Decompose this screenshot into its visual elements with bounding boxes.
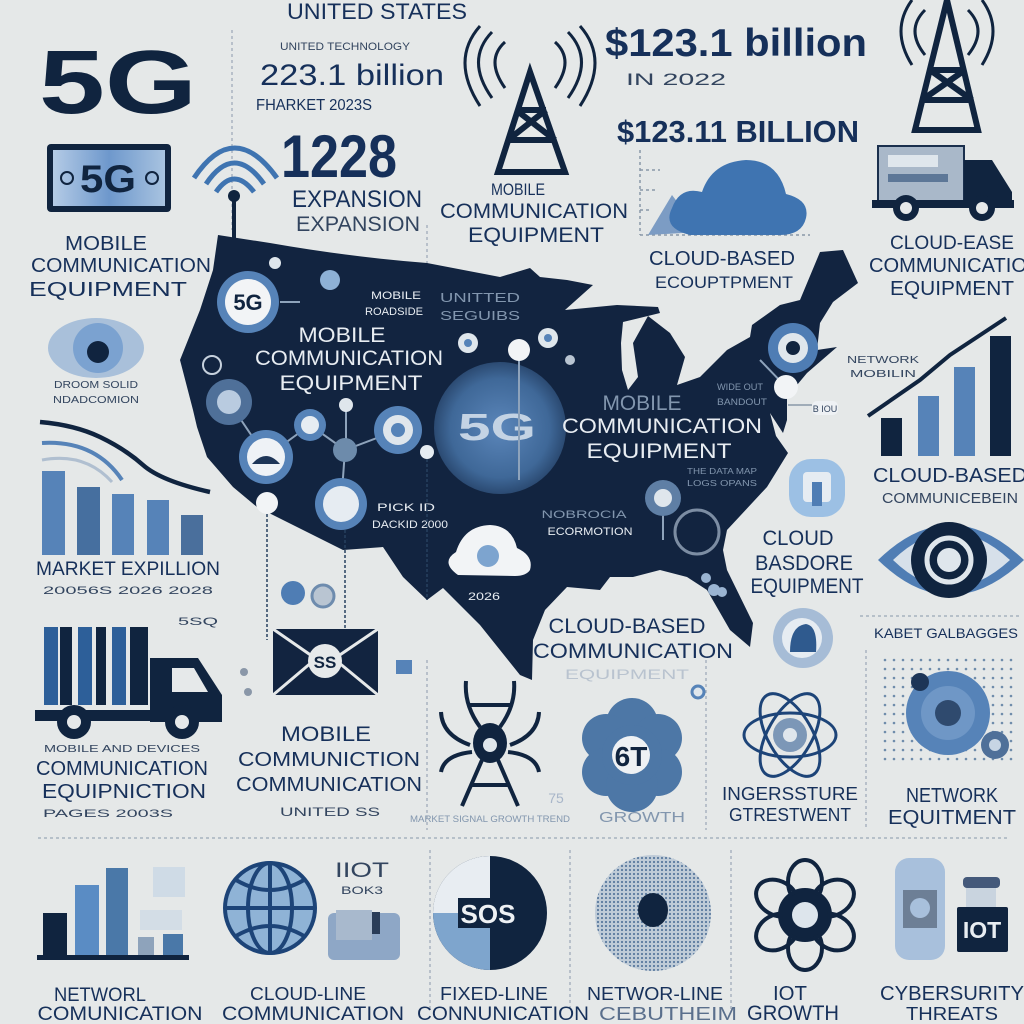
label: mobile communication equipment, left: EQUIPMENT (29, 279, 187, 301)
icon: 5G tablet: 5G (80, 158, 136, 201)
map labels: EQUIPMENT (280, 372, 423, 395)
icon: IoT box: IIOT (335, 859, 389, 882)
label: cloud-based communication: EQUIPMENT (565, 666, 690, 682)
map labels: MOBILE (602, 392, 682, 415)
label: cloud-base communication equipment: EQUIPMENT (890, 278, 1014, 300)
label: communication equipment, lower left (36, 744, 208, 820)
map labels: COMMUNICATION (255, 347, 443, 370)
map: network nodes (203, 257, 818, 597)
headline figure: $123.1 billion (605, 22, 867, 65)
pill note by east coast: B IOU (813, 404, 837, 414)
map labels: NOBROCIA (542, 509, 627, 521)
icon: 5G tablet (47, 144, 171, 212)
icon: cloud chart (640, 150, 810, 235)
label: IoT growth: IOT (773, 983, 807, 1005)
faint text strip: MARKET SIGNAL GROWTH TREND (410, 814, 571, 824)
faint text strip: 75 (548, 790, 564, 806)
dashed connector lines under map (267, 459, 427, 640)
label: cloud-base communication equipment: CLOUD-EASE (890, 233, 1014, 254)
map labels: ROADSIDE (365, 306, 423, 318)
headline figure (605, 22, 867, 149)
label: cloud basdore equipment: CLOUD (762, 527, 834, 550)
icon: truck lower left (35, 627, 222, 739)
icon: IoT device (895, 858, 1008, 960)
label: network equipment: EQUITMENT (888, 807, 1016, 829)
map labels: COMMUNICATION (562, 415, 762, 438)
map: central 5G globe (434, 362, 566, 494)
icon: flower atom (749, 860, 861, 970)
icon: small dots: 5SQ (178, 616, 219, 628)
label: cloud-based communication: CLOUD-BASED (548, 615, 706, 638)
chart: falling bar chart (40, 422, 210, 555)
map labels: SEGUIBS (440, 308, 520, 323)
map: cloud (448, 525, 531, 576)
map labels: MOBILE (371, 290, 421, 302)
label: infrastructure investment: GTRESTWENT (729, 805, 851, 825)
chart: rising bar chart: NETWORK (847, 355, 919, 366)
map labels: 2026 (468, 591, 500, 603)
heading: 5G: 5G (39, 33, 197, 133)
label: mobile communication equipment, top centre (440, 180, 628, 247)
icon: spider network (441, 681, 539, 806)
icon: atom infrastructure (744, 684, 836, 786)
icon: dotted disc (595, 855, 711, 971)
label: mobile communication, centre (236, 723, 422, 819)
map labels: LOGS OPANS (687, 479, 757, 488)
icon: envelope (273, 629, 378, 695)
label: mobile communication equipment, left: COMMUNICATION (31, 255, 211, 277)
label: cloud basdore equipment: BASDORE (755, 552, 853, 575)
icon: IoT flower: 6T (615, 741, 647, 772)
map: United States (180, 235, 858, 680)
label: cloud-line communication (222, 984, 404, 1024)
header text: United States market: FHARKET 2023S (256, 97, 372, 114)
label: cloud-based (873, 465, 1024, 507)
icon: wifi signal (194, 148, 277, 240)
map labels: EQUIPMENT (586, 440, 732, 463)
map labels: BANDOUT (717, 397, 768, 407)
icon: tower top right (901, 0, 993, 130)
label: mobile communication, centre: COMMUNICATION (236, 774, 422, 796)
label: cloud-based equipment (649, 248, 795, 292)
map: central 5G globe: 5G (458, 407, 536, 449)
icon: network dial in dotted panel (882, 655, 1018, 765)
map labels: THE DATA MAP (687, 467, 757, 476)
header text: United States market (256, 0, 467, 236)
map labels: DACKID 2000 (372, 519, 448, 531)
label: communication equipment, lower left: EQUIPNICTION (42, 781, 206, 803)
header text: United States market: EXPANSION (292, 186, 422, 213)
label: cloud-based equipment: ECOUPTPMENT (655, 273, 793, 292)
pill note by east coast (788, 401, 838, 415)
label: infrastructure investment: INGERSSTURE (722, 784, 858, 804)
label: communication equipment, lower left: PAGES 2003S (43, 808, 173, 820)
label: mobile communication equipment, top centre: COMMUNICATION (440, 200, 628, 223)
headline figure: IN 2022 (626, 70, 726, 89)
header text: United States market: UNITED TECHNOLOGY (280, 41, 411, 53)
label: mobile communication, centre: COMMUNICTION (238, 749, 420, 771)
label: mobile communication equipment, top centre: MOBILE (491, 180, 545, 199)
map labels: PICK ID (377, 502, 435, 514)
icon: globe (225, 863, 315, 953)
chart: rising bar chart: MOBILIN (850, 369, 916, 380)
label: network communication: NETWORL (54, 985, 146, 1006)
header text: United States market: EXPANSION (296, 213, 420, 236)
map: 5G node: 5G (233, 290, 263, 315)
icon: device blob (789, 459, 845, 517)
icon: round device left (48, 318, 144, 406)
label: infrastructure investment (722, 784, 858, 825)
label: market expillion (36, 559, 220, 597)
label: cybersurity threats: CYBERSURITY (880, 983, 1024, 1005)
map labels: UNITTED (440, 290, 520, 305)
map labels: MOBILE (298, 324, 386, 347)
icon: IoT box: BOK3 (341, 885, 383, 897)
icon: IoT device: IOT (963, 917, 1001, 943)
label: cybersurity threats: THREATS (906, 1004, 998, 1024)
label: fixed-line communication (417, 984, 589, 1024)
label: mobile communication equipment, left (29, 233, 211, 301)
label: cybersurity threats (880, 983, 1024, 1024)
label: cloud-based: COMMUNICEBEIN (882, 490, 1018, 507)
label: market expillion: 20056S 2026 2028 (43, 585, 213, 597)
label: communication equipment, lower left: COMMUNICATION (36, 758, 208, 780)
icon: IoT box (328, 859, 400, 960)
label: cloud-line communication: CLOUD-LINE (250, 984, 366, 1004)
icon: round device left: NDADCOMION (53, 395, 139, 406)
header text: United States market: 1228 (281, 123, 397, 190)
label: mobile communication, centre: MOBILE (281, 723, 371, 746)
label: mobile communication equipment, top centre: EQUIPMENT (468, 224, 604, 247)
label: network equipment (888, 785, 1016, 829)
label: network communication (38, 985, 202, 1024)
label: network-line: CEBUTHEIM (599, 1004, 737, 1024)
map labels (255, 290, 768, 603)
icon: IoT flower (582, 698, 685, 826)
label: cloud-base communication equipment (869, 233, 1024, 300)
label: mobile communication, centre: UNITED SS (280, 805, 380, 819)
faint text strip (410, 790, 571, 824)
label: cloud-base communication equipment: COMMUNICATIO (869, 255, 1024, 277)
headline figure: $123.11 BILLION (617, 114, 859, 149)
label: network-line (587, 984, 737, 1024)
label: market expillion: MARKET EXPILLION (36, 559, 220, 580)
map labels: ECORMOTION (548, 526, 633, 538)
icon: small dots (178, 581, 412, 696)
map: 5G node (217, 271, 279, 333)
label: communication equipment, lower left: MOBILE AND DEVICES (44, 744, 200, 755)
label: network equipment: NETWORK (906, 785, 999, 807)
label: market challenges: KABET GALBAGGES (874, 625, 1018, 641)
label: cloud basdore equipment (750, 527, 864, 598)
label: cloud basdore equipment: EQUIPMENT (750, 575, 864, 598)
map labels: WIDE OUT (717, 382, 764, 392)
icon: SOS donut (433, 856, 547, 970)
icon: IoT flower: GROWTH (599, 809, 685, 826)
icon: envelope: SS (314, 653, 336, 672)
label: fixed-line communication: FIXED-LINE (440, 984, 548, 1004)
label: cloud-based communication: COMMUNICATION (533, 640, 733, 663)
chart: rising bar chart (847, 318, 1011, 456)
icon: eye (878, 522, 1024, 598)
label: network-line: NETWOR-LINE (587, 984, 723, 1004)
icon: round device left: DROOM SOLID (54, 380, 138, 391)
label: cloud-based: CLOUD-BASED (873, 465, 1024, 487)
label: mobile communication equipment, left: MOBILE (65, 233, 147, 255)
label: IoT growth (747, 983, 839, 1024)
label: cloud-based communication (533, 615, 733, 682)
icon: truck top right (872, 146, 1014, 221)
icon: SOS donut: SOS (461, 899, 515, 929)
icon: dome device (692, 608, 833, 698)
label: cloud-based equipment: CLOUD-BASED (649, 248, 795, 270)
header text: United States market: 223.1 billion (260, 59, 444, 92)
icon: city towers (37, 867, 189, 960)
icon: tower with signal waves, centre (465, 26, 595, 172)
